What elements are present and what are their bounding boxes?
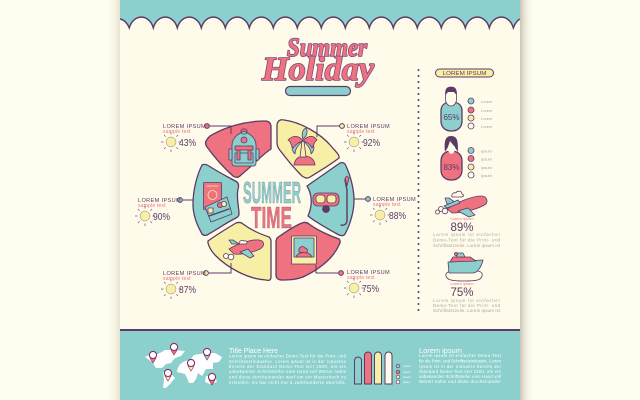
segment: photo [276, 222, 340, 280]
callout: bottom left 87% [161, 263, 231, 299]
title: Summer Holiday [261, 33, 375, 88]
callout: right 88%: 88% [389, 210, 406, 222]
callout: bottom left 87%: sample text [163, 276, 191, 282]
paper background [120, 0, 520, 400]
callout: right 88% [354, 197, 416, 225]
callout: top left 43% [161, 124, 231, 152]
bar chart [354, 352, 392, 384]
stat: 75%: Demo-Text für die Print- und [433, 303, 501, 308]
world map with pins [145, 343, 222, 388]
callout: bottom right 75%: LOREM IPSUM [347, 270, 390, 276]
stat: 89%: Schriftsetzzeile. Lorem ipsum ist [433, 243, 501, 248]
scallop edge line [120, 17, 520, 28]
stat: 89%: Lorem ipsum ist einfacher [433, 232, 501, 237]
title: Summer Holiday: Summer [287, 33, 368, 62]
callout: bottom right 75% [316, 265, 390, 298]
legend: male: Lorem [481, 99, 493, 104]
legend: male: Lorem [481, 108, 493, 113]
pin [170, 343, 178, 355]
right column header pill: LOREM IPSUM [442, 71, 486, 77]
icon: snorkel [313, 176, 349, 225]
callout: top left 43%: LOREM IPSUM [163, 124, 206, 130]
stat: 75%: Schriftsetzzeile. Lorem ipsum ist [433, 308, 501, 313]
segment: snorkel mask [307, 163, 354, 236]
footer text block: Lorem ipsum: Standard Demo-Text seit 1500, als ein [419, 369, 502, 374]
callout: left 90%: 90% [153, 211, 170, 223]
footer text block: Lorem ipsum: Lorem ipsum ist einfacher Demo-Text [419, 353, 502, 358]
legend: female: Ipsum [481, 148, 493, 154]
footer text block: Title Place Here: unbekannter Schriftsteller eine Hand voll Wörter nahm [229, 369, 346, 374]
pin [149, 351, 157, 363]
footer text block: Title Place Here: Schriftsetzindustrie. Lorem ipsum ist in der Industrie [229, 359, 347, 364]
callout: right 88%: sample text [373, 202, 401, 208]
callout: right 88%: LOREM IPSUM [373, 197, 416, 203]
icon: ship [446, 252, 483, 281]
callout: top left 43%: sample text [163, 129, 191, 135]
footer text block: Title Place Here: Lorem ipsum ist einfacher Demo-Text für die Print- und [229, 354, 347, 358]
segment: palm island [277, 120, 339, 178]
footer text block: Lorem ipsum: Lorem ipsum [419, 346, 462, 355]
icon: palm tree [288, 128, 317, 165]
callout: top right 92% [317, 124, 390, 152]
icon: photo frame [292, 236, 316, 264]
stat: 89%: Demo-Text für die Print- und [433, 238, 501, 242]
chart legend [396, 364, 412, 384]
pin [208, 373, 216, 385]
callout: top right 92%: 92% [363, 137, 380, 149]
title: Summer Holiday: Holiday [261, 51, 375, 88]
callout: bottom right 75%: sample text [347, 275, 375, 281]
stat: 89%: Lorem ipsum [450, 216, 474, 221]
callout: bottom right 75%: 75% [362, 283, 379, 295]
callout: top right 92%: LOREM IPSUM [347, 124, 390, 130]
pin [203, 348, 211, 360]
pin [164, 369, 172, 381]
footer text block: Lorem ipsum: unbekannter Schriftsteller eine Hand voll [419, 374, 501, 379]
stat: 89%: 89% [450, 222, 474, 234]
footer text block: Title Place Here: erstellen. Es hat nicht nur 5 Jahrhunderte überlebt, [229, 380, 346, 385]
center text: Summer Time [243, 175, 301, 235]
legend: male [468, 98, 493, 129]
stat: 89% [433, 216, 501, 248]
stat: 75%: 75% [450, 287, 474, 299]
wheel diagram [193, 120, 354, 280]
callout: bottom left 87%: LOREM IPSUM [163, 271, 206, 277]
title pill [286, 86, 350, 96]
legend: female [468, 148, 493, 178]
callout: top left 43%: 43% [179, 137, 196, 149]
footer text block: Lorem ipsum [419, 346, 502, 384]
legend: female: Ipsum [481, 173, 493, 178]
footer text block: Title Place Here: und diese durcheinander warf um ein Musterbuch zu [229, 374, 347, 380]
chart legend: Lorem [403, 375, 412, 379]
callout: left 90% [135, 198, 193, 226]
footer text block: Title Place Here [229, 348, 347, 385]
legend: female: Ipsum [481, 156, 493, 162]
male figure 65%: 65% [443, 113, 460, 122]
center text: Summer Time: TIME [251, 200, 292, 235]
chart legend: Ipsum [403, 380, 411, 384]
stat: 75%: Lorem ipsum [450, 281, 474, 286]
scalloped top banner [120, 0, 520, 28]
callout: left 90%: sample text [138, 203, 166, 209]
right column header pill [436, 69, 494, 77]
pin [187, 359, 195, 371]
female figure 83% [441, 136, 462, 180]
footer text block: Lorem ipsum: Ipsum ist in der Industrie bereits der [419, 364, 502, 369]
footer text block: Title Place Here: bereits der Standard Demo-Text seit 1500, als ein [229, 364, 347, 369]
stat: 75% [433, 281, 501, 313]
legend: female: Ipsum [481, 165, 493, 170]
footer text block: Title Place Here: Title Place Here [229, 348, 278, 355]
wheel diagram: SUMMER [243, 175, 301, 210]
chart legend: Lorem [403, 364, 412, 368]
segment: backpack [206, 121, 271, 177]
legend: male: Lorem [481, 116, 493, 121]
callout: bottom left 87%: 87% [179, 284, 196, 296]
icon: airplane large [436, 191, 487, 217]
footer text block: Lorem ipsum: Wörter nahm und diese durcheinander [419, 379, 502, 384]
footer text block: Lorem ipsum: für die Print- und Schriftsetzindustrie. Lorem [419, 358, 502, 364]
female figure 83%: 83% [443, 163, 460, 172]
legend: male: Lorem [481, 124, 493, 129]
callout: top right 92%: sample text [347, 129, 375, 135]
icon: backpack [229, 129, 259, 166]
chart legend: Ipsum [403, 370, 411, 374]
icon: passport and card [204, 182, 232, 222]
footer band [120, 329, 520, 400]
segment: airplane [208, 222, 271, 280]
icon: airplane [224, 240, 264, 260]
callout: left 90%: LOREM IPSUM [138, 198, 181, 204]
stat: 75%: Lorem ipsum ist einfacher [433, 298, 501, 303]
male figure 65% [441, 87, 462, 131]
segment: passport and card [193, 164, 239, 235]
